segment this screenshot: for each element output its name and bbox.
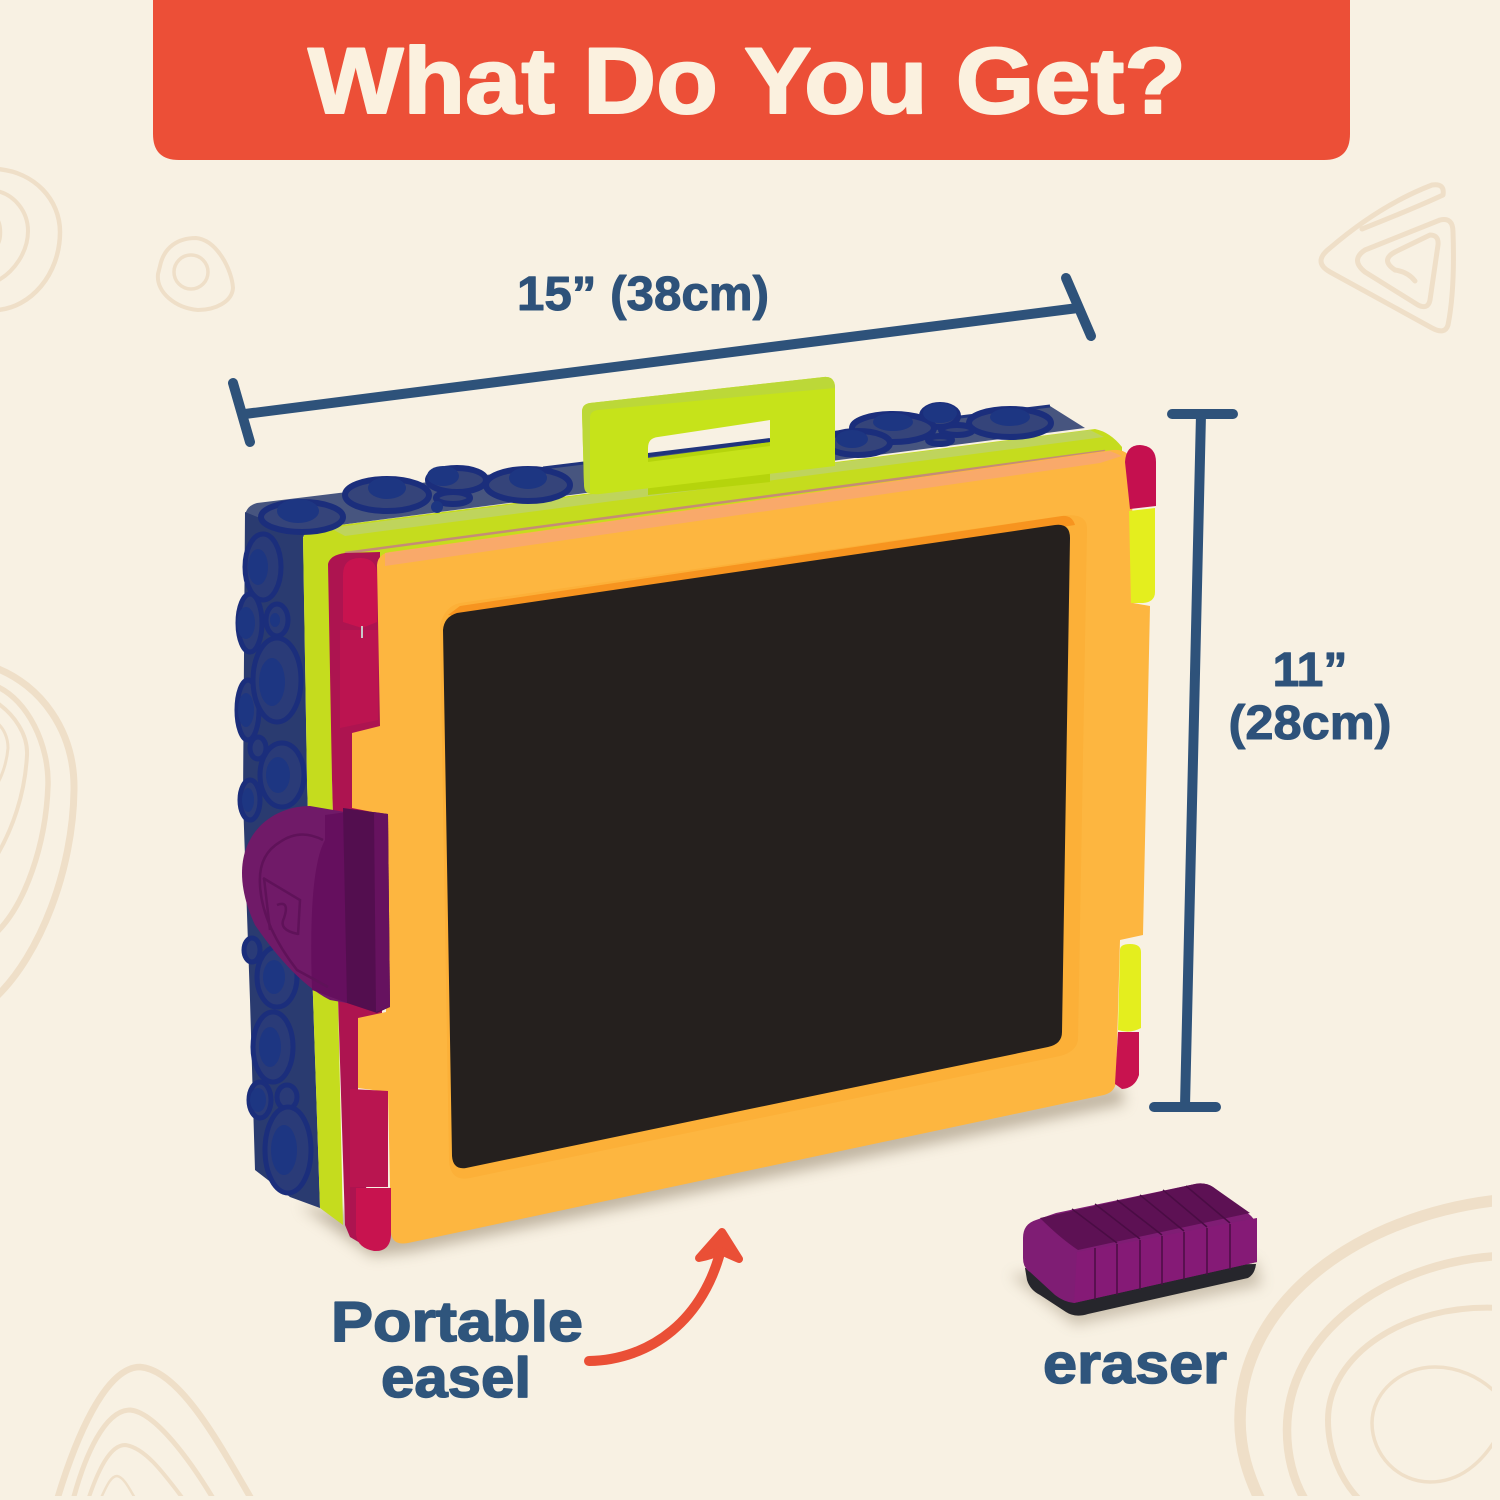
pink layer [328,552,382,1250]
top surface of case [245,406,1085,537]
lime layer of case [303,429,1122,1225]
embossed logo on clasp [260,834,328,987]
height label: (28cm) [1228,697,1392,750]
height label [1228,644,1392,750]
title banner: What Do You Get? [308,28,1186,133]
frame top peach edge [385,451,1122,566]
eraser [1010,1183,1262,1325]
height dimension line [1154,414,1233,1107]
red arrow [589,1232,739,1361]
pink and yellow hinges [340,445,1156,1251]
width dimension line [233,278,1091,442]
eraser label: eraser [1043,1332,1227,1396]
board recess rim [440,515,1087,1179]
top rings and domes [261,403,1051,532]
handle [582,377,835,495]
portable easel label: easel [381,1346,531,1410]
orange frame [352,450,1150,1244]
portable easel label: Portable [331,1290,583,1354]
width label: 15” (38cm) [517,268,769,321]
chalkboard [443,525,1070,1168]
height label: 11” [1273,644,1347,697]
left side rings and domes [237,534,311,1193]
portable easel label [331,1290,583,1410]
portable easel toy [237,377,1156,1256]
purple clasp [242,806,390,1013]
ground shadow [300,1085,1125,1256]
title banner [153,0,1350,160]
left side of case [243,512,320,1208]
